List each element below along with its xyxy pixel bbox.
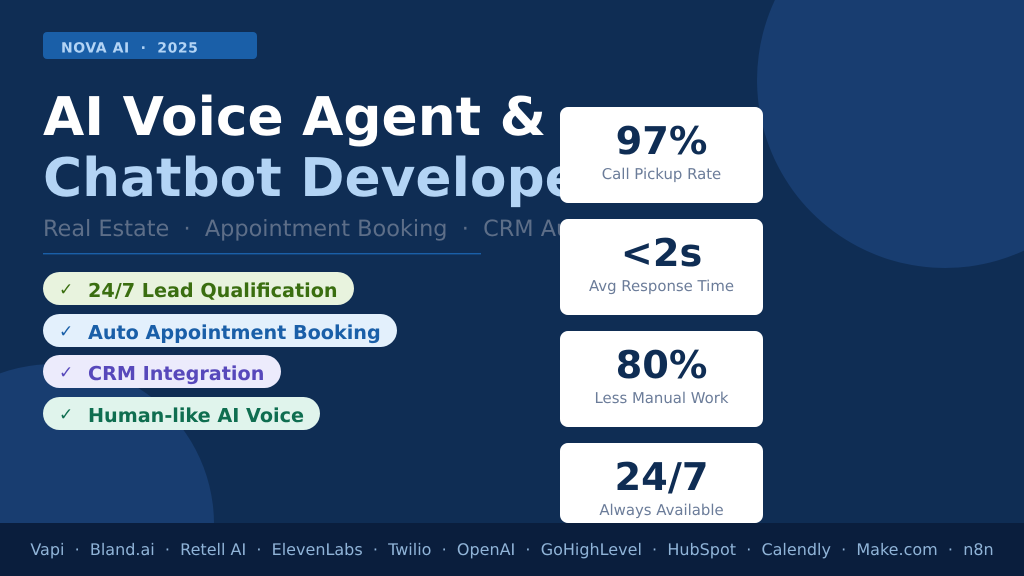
- stat value: 24/7: [615, 455, 708, 500]
- subtitle: Real Estate · Appointment Booking · CRM Automation: [43, 216, 671, 242]
- stat label: Call Pickup Rate: [602, 165, 721, 183]
- divider: [43, 253, 481, 254]
- title line 1: AI Voice Agent &: [43, 86, 546, 148]
- badge text: NOVA AI · 2025: [61, 40, 198, 56]
- pill: CRM integration: [43, 355, 281, 388]
- pill label: 24/7 Lead Qualification: [88, 279, 338, 302]
- stat value: 97%: [616, 119, 707, 164]
- pill: human-like voice: [43, 397, 320, 430]
- pill label: CRM Integration: [88, 362, 264, 385]
- stat label: Less Manual Work: [594, 389, 728, 407]
- stat card: availability: [560, 443, 763, 523]
- badge: [43, 32, 257, 59]
- check icon: ✓: [59, 322, 73, 342]
- stat value: 80%: [616, 343, 707, 388]
- pill: appointment booking: [43, 314, 397, 347]
- check icon: ✓: [59, 405, 73, 425]
- pill: lead qualification: [43, 272, 354, 305]
- footer bar: [0, 523, 1024, 576]
- stat card: manual work: [560, 331, 763, 427]
- pill label: Human-like AI Voice: [88, 404, 304, 427]
- tools list: Vapi · Bland.ai · Retell AI · ElevenLabs · Twilio · OpenAI · GoHighLevel · HubSpot · Calendly · Make.com · n8n: [30, 540, 994, 559]
- stat label: Always Available: [599, 501, 724, 519]
- feature pills: [43, 272, 397, 430]
- stat card: call pickup rate: [560, 107, 763, 203]
- stat value: <2s: [621, 231, 702, 276]
- title line 2: Chatbot Developer: [43, 146, 607, 208]
- stat card: response time: [560, 219, 763, 315]
- check icon: ✓: [59, 280, 73, 300]
- pill label: Auto Appointment Booking: [88, 321, 381, 344]
- stat label: Avg Response Time: [589, 277, 734, 295]
- check icon: ✓: [59, 363, 73, 383]
